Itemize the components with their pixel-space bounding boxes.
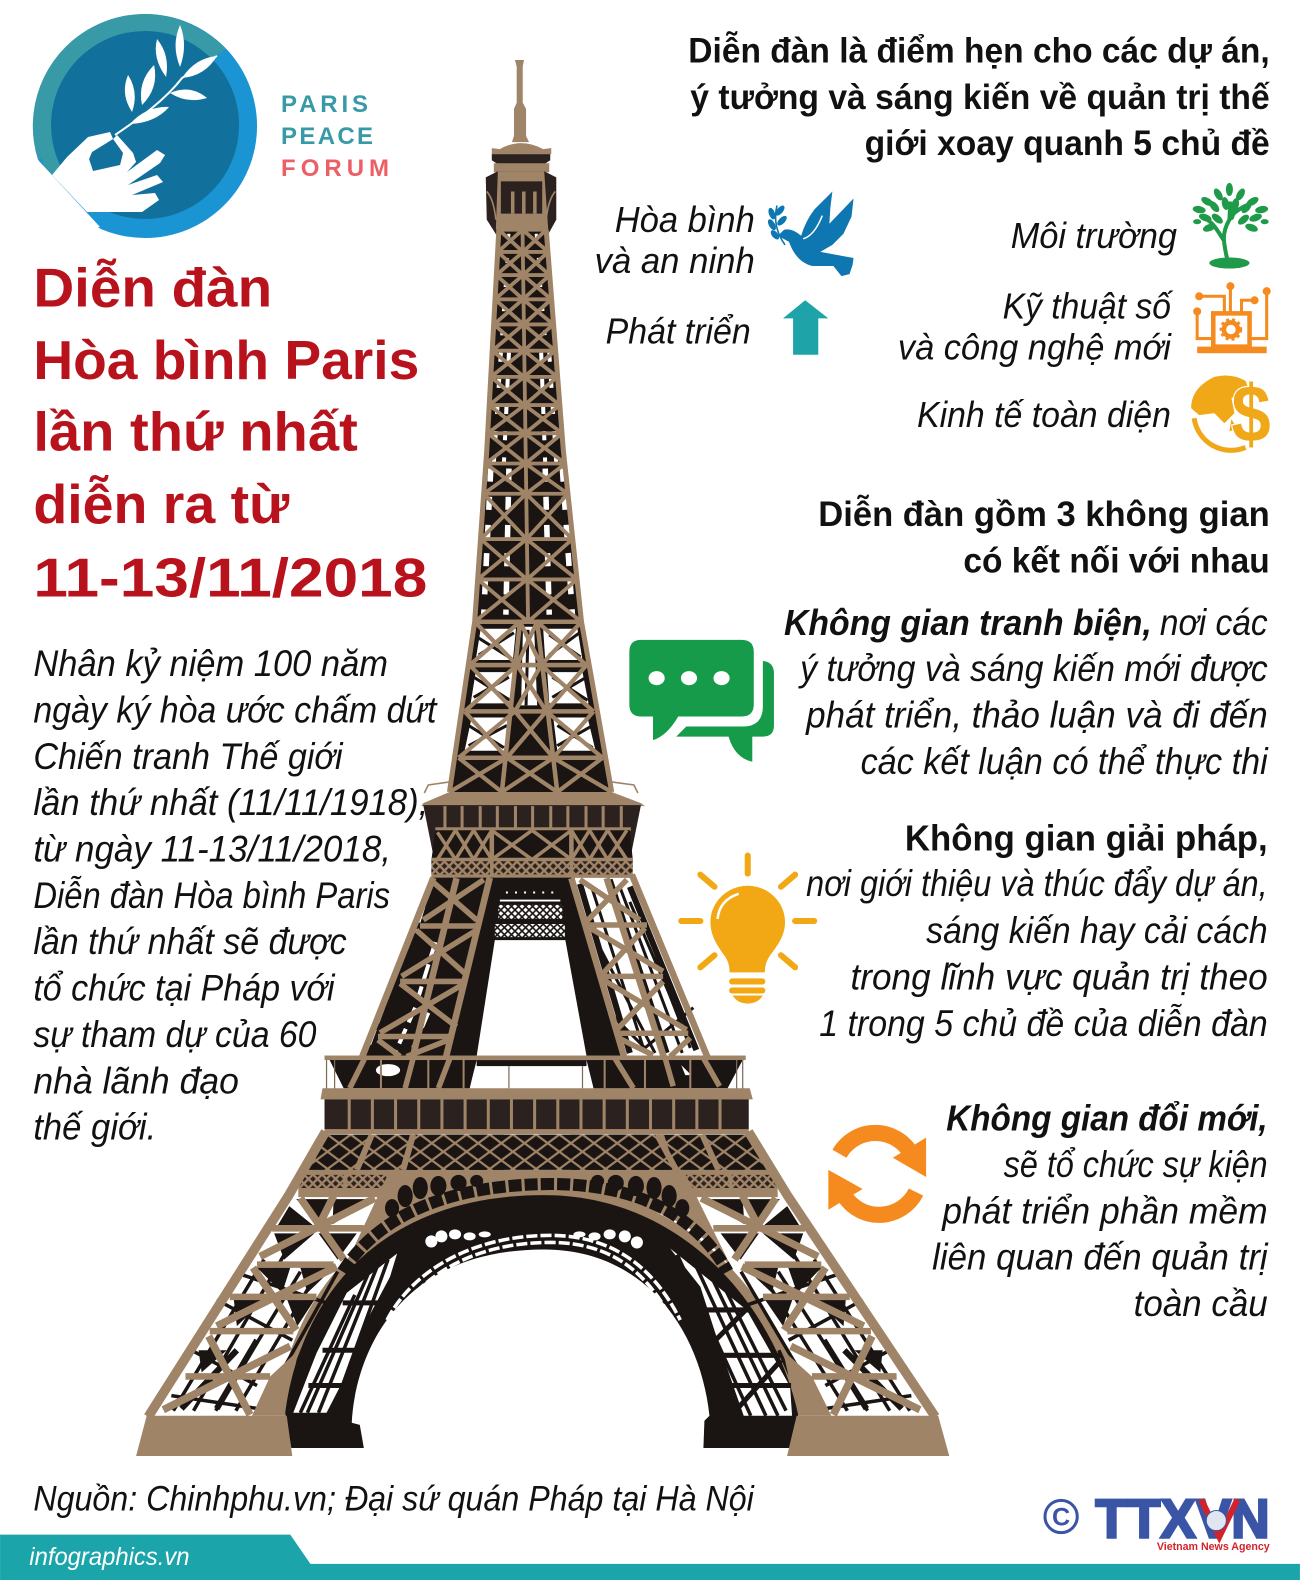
tower: shaft lattice	[449, 230, 612, 792]
theme: digital and new technology	[898, 282, 1271, 368]
Eiffel tower illustration	[136, 60, 949, 1456]
theme: digital and new technology: và công nghệ mới	[898, 327, 1172, 368]
text: debate	[784, 601, 1269, 782]
tower: second platform	[421, 782, 645, 878]
icon: tree	[1192, 183, 1269, 269]
theme: peace and security: Hòa bình	[615, 199, 755, 240]
heading: three spaces: Diễn đàn gồm 3 không gian	[818, 494, 1270, 534]
theme: digital and new technology: Kỹ thuật số	[1003, 285, 1174, 326]
text: debate: ý tưởng và sáng kiến mới được	[797, 647, 1268, 689]
intro paragraph: lần thứ nhất (11/11/1918),	[33, 781, 428, 823]
title: Diễn đàn	[33, 257, 272, 318]
intro paragraph	[33, 642, 438, 1148]
tower: upper legs and central opening	[350, 875, 720, 1088]
space: debate	[629, 601, 1269, 782]
text: solutions: trong lĩnh vực quản trị theo	[851, 956, 1268, 998]
text: debate: nơi các	[1160, 601, 1268, 643]
text: innovation: sẽ tổ chức sự kiện	[1004, 1143, 1268, 1185]
intro paragraph: nhà lãnh đạo	[33, 1059, 239, 1101]
space: solutions	[681, 817, 1268, 1044]
tower: pedestals	[136, 1416, 949, 1456]
theme: inclusive economy	[917, 369, 1271, 459]
source line: Nguồn: Chinhphu.vn; Đại sứ quán Pháp tại Hà Nội	[33, 1479, 755, 1518]
heading: five themes	[688, 30, 1270, 163]
TTXVN agency logo: TTXVN	[1095, 1489, 1270, 1550]
icon: refresh arrows	[828, 1133, 926, 1215]
title: 11-13/11/2018	[33, 548, 427, 609]
intro paragraph: lần thứ nhất sẽ được	[33, 920, 347, 962]
text: debate: phát triển, thảo luận và đi đến	[805, 694, 1268, 736]
text: solutions: sáng kiến hay cải cách	[926, 909, 1268, 951]
tower: first platform	[320, 1056, 753, 1134]
icon: light bulb	[681, 855, 814, 1004]
intro paragraph: ngày ký hòa ước chấm dứt	[33, 688, 438, 730]
logo emblem: hand with olive branch	[5, 14, 257, 245]
logo wordmark	[281, 91, 389, 182]
heading: five themes: Diễn đàn là điểm hẹn cho các dự án,	[688, 30, 1270, 70]
footer bar	[0, 1535, 1300, 1580]
TTXVN agency logo: C	[1052, 1504, 1070, 1532]
tower: lower legs	[148, 1132, 935, 1417]
logo: Paris Peace Forum	[5, 14, 389, 245]
space: innovation	[828, 1098, 1269, 1324]
footer bar: infographics.vn	[29, 1543, 190, 1571]
tower: arch crown with scallops	[343, 1135, 734, 1272]
text: innovation: Không gian đổi mới,	[946, 1098, 1268, 1139]
heading: five themes: ý tưởng và sáng kiến về quản trị thế	[690, 78, 1270, 117]
intro paragraph: sự tham dự của 60	[33, 1013, 317, 1055]
intro paragraph: Diễn đàn Hòa bình Paris	[33, 874, 390, 916]
tower: antenna and top	[486, 60, 556, 239]
icon: chat bubbles	[629, 640, 774, 762]
intro paragraph: từ ngày 11-13/11/2018,	[33, 828, 391, 870]
text: innovation	[932, 1098, 1269, 1324]
intro paragraph: tổ chức tại Pháp với	[33, 967, 336, 1009]
text: solutions: 1 trong 5 chủ đề của diễn đàn	[819, 1002, 1268, 1044]
text: solutions	[806, 817, 1268, 1044]
title	[33, 257, 427, 609]
upper left leg	[350, 878, 490, 1088]
icon: globe with dollar	[1191, 369, 1271, 459]
logo wordmark: PEACE	[281, 123, 373, 150]
theme: development	[606, 300, 828, 355]
logo wordmark: FORUM	[281, 155, 389, 182]
intro paragraph: Nhân kỷ niệm 100 năm	[33, 642, 388, 684]
theme: development: Phát triển	[606, 311, 751, 352]
tower: arch	[285, 1195, 798, 1448]
intro paragraph: thế giới.	[33, 1106, 156, 1148]
text: innovation: liên quan đến quản trị	[932, 1236, 1269, 1278]
icon: dove	[766, 191, 854, 276]
theme: environment	[1011, 183, 1269, 269]
theme: environment: Môi trường	[1011, 215, 1177, 256]
upper right leg	[571, 875, 720, 1088]
text: solutions: Không gian giải pháp,	[905, 817, 1268, 858]
theme: peace and security: và an ninh	[595, 240, 755, 281]
icon: globe with dollar: $	[1231, 369, 1271, 459]
heading: three spaces: có kết nối với nhau	[963, 541, 1270, 580]
text: innovation: toàn cầu	[1134, 1282, 1268, 1324]
text: debate: các kết luận có thể thực thi	[861, 740, 1269, 782]
text: debate: Không gian tranh biện,	[784, 602, 1152, 643]
title: lần thứ nhất	[33, 401, 358, 462]
title: diễn ra từ	[33, 474, 290, 535]
icon: circuit laptop	[1193, 282, 1271, 353]
title: Hòa bình Paris	[33, 330, 419, 391]
icon: up arrow	[783, 300, 828, 355]
intro paragraph: Chiến tranh Thế giới	[33, 735, 344, 777]
text: innovation: phát triển phần mềm	[941, 1189, 1268, 1231]
logo wordmark: PARIS	[281, 91, 368, 118]
TTXVN agency logo: Vietnam News Agency	[1157, 1541, 1270, 1553]
theme: inclusive economy: Kinh tế toàn diện	[917, 394, 1171, 435]
theme: peace and security	[595, 191, 854, 281]
heading: three spaces	[818, 494, 1270, 580]
heading: five themes: giới xoay quanh 5 chủ đề	[865, 124, 1270, 163]
